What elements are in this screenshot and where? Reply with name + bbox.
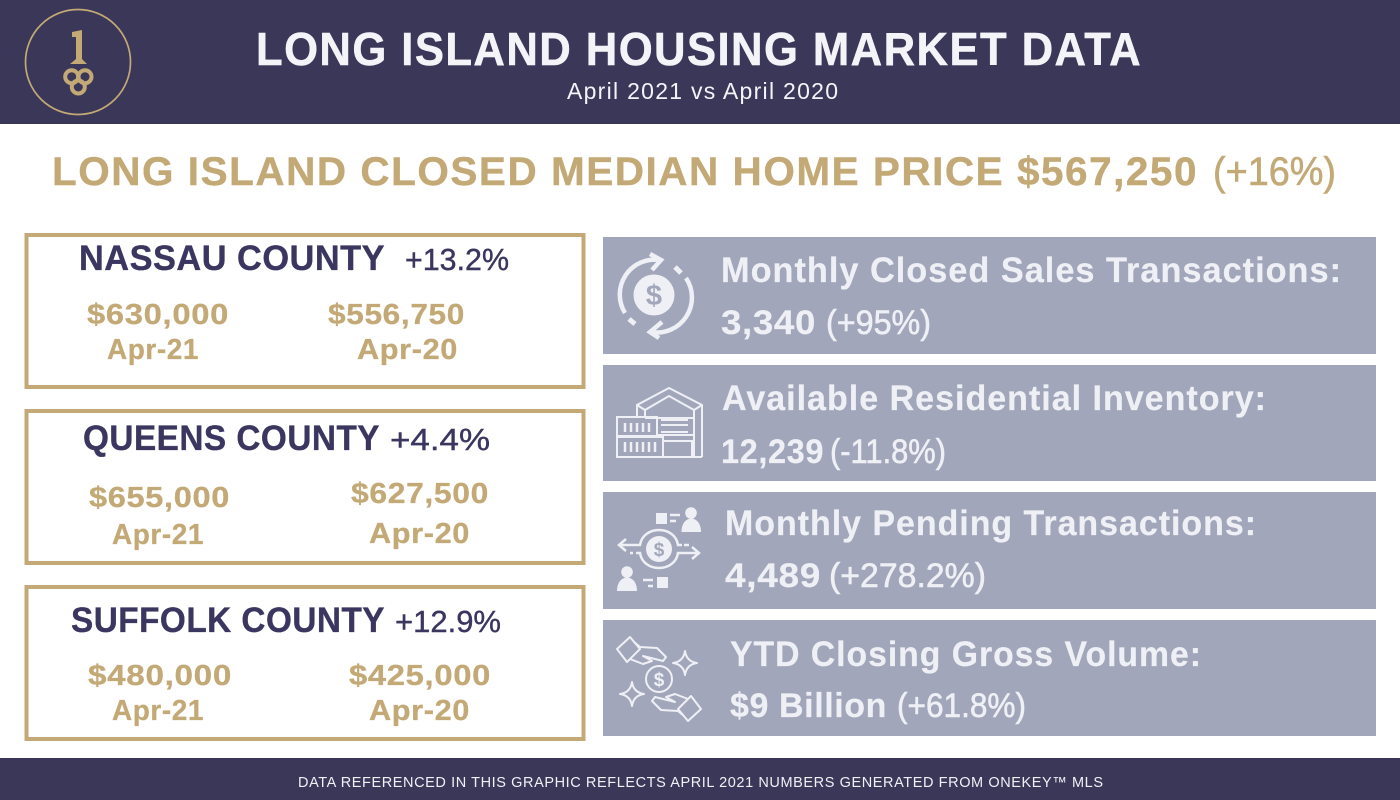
Suffolk April 2021	[88, 660, 232, 727]
Queens April 2021	[89, 482, 230, 551]
metric label: Monthly Closed Sales Transactions:	[721, 251, 1342, 290]
Nassau April 2020: $556,750	[328, 299, 465, 331]
metric value	[721, 304, 931, 342]
metric value: 3,340	[721, 304, 816, 342]
Nassau April 2021: $630,000	[87, 299, 229, 331]
panel: YTD gross volume	[603, 620, 1376, 736]
change: Nassau: +13.2%	[405, 242, 509, 277]
headline: closed median home price: (+16%)	[1213, 150, 1336, 194]
Nassau April 2021: Apr-21	[107, 334, 199, 366]
icon: logo	[26, 10, 130, 114]
Suffolk April 2021: $480,000	[88, 660, 232, 692]
Nassau April 2020	[328, 299, 465, 366]
panel: residential inventory	[603, 365, 1376, 481]
panel: Nassau County	[26, 235, 584, 387]
panel: Suffolk County	[26, 587, 584, 739]
metric value: 12,239	[721, 433, 824, 471]
header band	[0, 0, 1400, 124]
change: Queens: +4.4%	[390, 422, 490, 457]
icon: exchange with people	[617, 507, 701, 591]
headline: closed median home price: LONG ISLAND CLOSED MEDIAN HOME PRICE $567,250	[52, 150, 1198, 194]
metric label: Monthly Pending Transactions:	[725, 504, 1257, 543]
icon: circular dollar	[620, 254, 692, 338]
Queens April 2021: Apr-21	[112, 519, 204, 551]
metric value: (+61.8%)	[897, 687, 1026, 725]
metric value: (+95%)	[826, 304, 931, 342]
footer band	[0, 758, 1400, 800]
Queens April 2020	[351, 478, 489, 550]
metric label: Available Residential Inventory:	[722, 379, 1267, 418]
metric value	[730, 687, 1026, 725]
icon: hands with coin: $	[654, 670, 665, 691]
title: LONG ISLAND HOUSING MARKET DATA	[256, 23, 1142, 75]
panel: pending transactions	[603, 492, 1376, 609]
Suffolk April 2020: Apr-20	[369, 695, 470, 727]
heading: Nassau: NASSAU COUNTY	[79, 239, 385, 278]
footer note: DATA REFERENCED IN THIS GRAPHIC REFLECTS APRIL 2021 NUMBERS GENERATED FROM ONEKEY™ MLS	[298, 775, 1103, 791]
icon: circular dollar: $	[646, 280, 662, 312]
metric value: 4,489	[725, 557, 821, 595]
metric value: (+278.2%)	[829, 557, 986, 595]
heading: Suffolk: SUFFOLK COUNTY	[71, 601, 385, 640]
metric value	[725, 557, 986, 595]
subtitle: April 2021 vs April 2020	[567, 78, 838, 104]
icon: exchange with people: $	[654, 540, 665, 561]
panel: Queens County	[26, 411, 584, 563]
Queens April 2020: $627,500	[351, 478, 489, 510]
Nassau April 2020: Apr-20	[357, 334, 458, 366]
Queens April 2020: Apr-20	[369, 518, 470, 550]
Queens April 2021: $655,000	[89, 482, 230, 514]
icon: warehouse	[617, 388, 702, 457]
heading: Queens: QUEENS COUNTY	[83, 419, 380, 458]
metric value: $9 Billion	[730, 687, 887, 725]
icon: hands with coin	[617, 637, 701, 721]
metric value: (-11.8%)	[830, 433, 946, 471]
Suffolk April 2020: $425,000	[349, 660, 491, 692]
metric value	[721, 433, 946, 471]
Suffolk April 2020	[349, 660, 491, 727]
metric label: YTD Closing Gross Volume:	[730, 635, 1202, 674]
Suffolk April 2021: Apr-21	[112, 695, 204, 727]
panel: monthly closed sales	[603, 237, 1376, 354]
Nassau April 2021	[87, 299, 229, 366]
change: Suffolk: +12.9%	[395, 604, 501, 639]
